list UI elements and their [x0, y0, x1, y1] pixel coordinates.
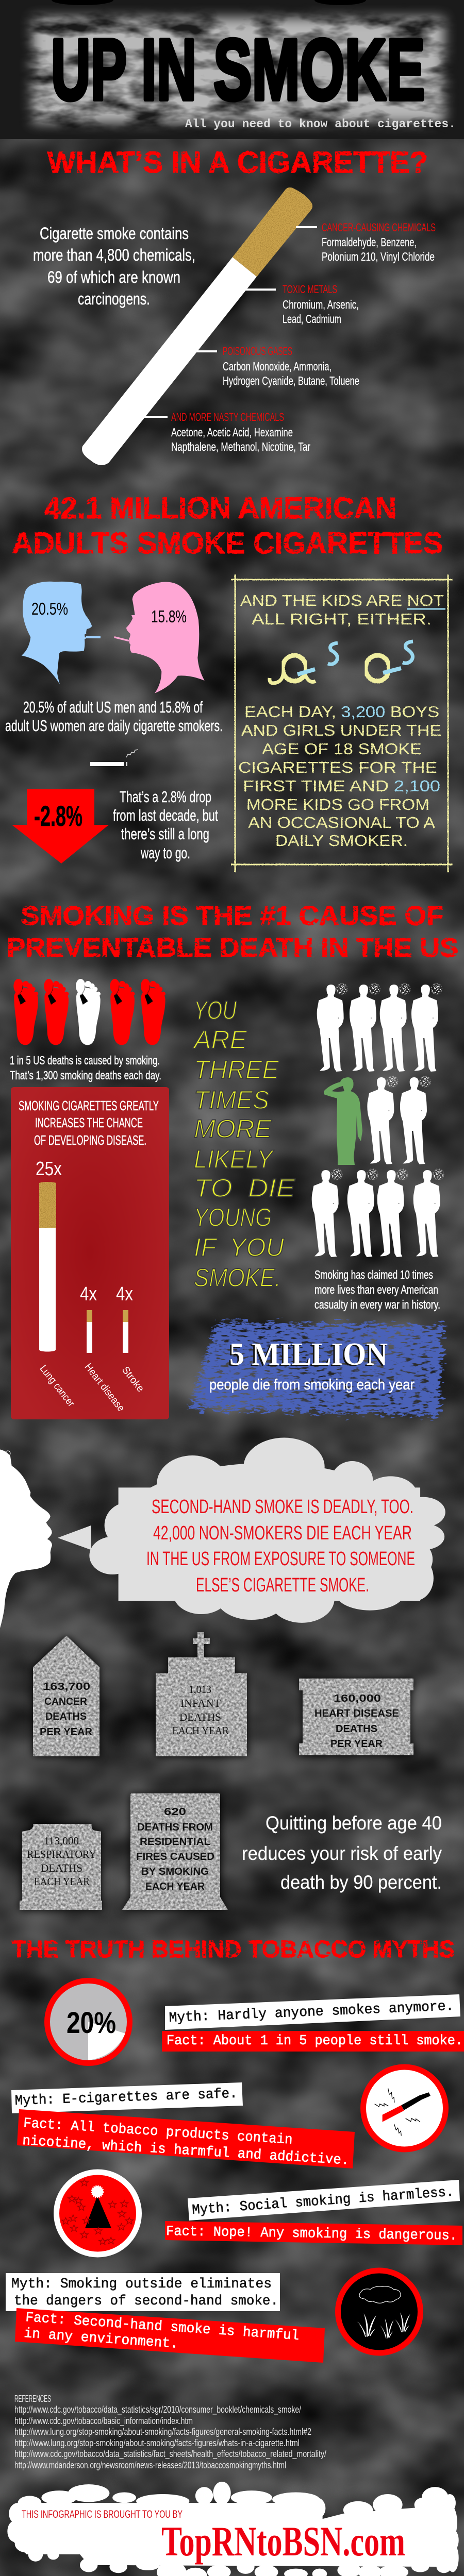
myth 4: the dangers of second-hand smoke. — [14, 2294, 278, 2309]
label: toxic metals — [245, 283, 359, 326]
heading: what's in a cigarette: WHAT’S IN A CIGARETTE? — [47, 146, 428, 179]
caption: 1 in 5 deaths: 1 in 5 US deaths is caused by smoking. — [10, 1054, 160, 1067]
label: and more nasty chemicals: Napthalene, Methanol, Nicotine, Tar — [171, 440, 310, 453]
chalk body text: FIRST TIME AND 2,100 — [243, 777, 440, 795]
intro text: Cigarette smoke contains — [40, 224, 189, 243]
myth 3: Myth: Social smoking is harmless. — [192, 2185, 454, 2218]
heading: tobacco myths: THE TRUTH BEHIND TOBACCO MYTHS — [12, 1936, 455, 1962]
chalk body text: MORE KIDS GO FROM — [246, 795, 429, 814]
tombstone: respiratory: 113,000 — [44, 1835, 79, 1847]
text: drop from last decade: there’s still a long — [121, 825, 209, 843]
panel: cigarette contents — [33, 188, 436, 465]
callout: second-hand smoke cloud — [58, 1438, 445, 1623]
heading: 42.1 million adults: 42.1 MILLION AMERICAN — [44, 492, 396, 525]
caption: daily smokers — [5, 698, 223, 735]
panel: chalkboard kids — [231, 574, 453, 872]
label: poisonous gases: POISONOUS GASES — [223, 345, 292, 358]
label: toxic metals: Chromium, Arsenic, — [283, 298, 359, 311]
title: IN — [141, 21, 196, 118]
text: three times more likely: IF YOU — [194, 1233, 285, 1262]
text: quitting before 40: reduces your risk of early — [242, 1843, 442, 1864]
footer cloud — [7, 2482, 459, 2576]
panel: disease risk chart — [11, 1087, 169, 1419]
caption: 1 in 5 deaths — [10, 1054, 161, 1082]
tombstone: cancer — [33, 1636, 100, 1756]
icon: man profile — [22, 582, 101, 684]
caption: 1 in 5 deaths: That’s 1,300 smoking deaths each day. — [10, 1069, 161, 1082]
arrow: -2.8% drop: -2.8% — [34, 800, 82, 832]
callout: 5 million: people die from smoking each year — [209, 1377, 415, 1393]
bar: stroke 4x: 4x — [116, 1283, 133, 1305]
bar: heart disease 4x: 4x — [80, 1283, 97, 1305]
callout: 5 million: 5 MILLION — [229, 1337, 388, 1372]
fact 2 — [17, 2109, 355, 2169]
chalk heading: ALL RIGHT, EITHER. — [252, 610, 432, 628]
label: poisonous gases — [195, 345, 359, 387]
intro text: more than 4,800 chemicals, — [33, 246, 195, 264]
label: cancer-causing chemicals: Formaldehyde, Benzene, — [322, 235, 417, 249]
chalk body text: CIGARETTES FOR THE — [238, 758, 437, 776]
heading: number one cause: SMOKING IS THE #1 CAUSE OF — [21, 901, 443, 931]
tombstone: cancer: CANCER — [44, 1696, 88, 1707]
bar: heart disease 4x: Heart disease — [82, 1361, 127, 1414]
tombstone: residential fires: RESIDENTIAL — [140, 1836, 210, 1848]
text: drop from last decade: way to go. — [140, 844, 190, 862]
tombstone: respiratory: RESPIRATORY — [27, 1848, 96, 1860]
tombstone: residential fires: FIRES CAUSED — [136, 1851, 214, 1862]
references — [14, 2394, 326, 2470]
label: and more nasty chemicals — [144, 411, 310, 453]
text: drop from last decade: from last decade, but — [113, 806, 218, 824]
chalk body text: AGE OF 18 SMOKE — [262, 740, 422, 758]
label: and more nasty chemicals: AND MORE NASTY CHEMICALS — [171, 411, 284, 423]
chalk body text — [238, 703, 441, 850]
tombstone: respiratory: EACH YEAR — [34, 1875, 90, 1888]
bar: stroke 4x: Stroke — [120, 1364, 146, 1394]
text: three times more likely: YOUNG — [194, 1203, 272, 1232]
label: poisonous gases: Carbon Monoxide, Ammonia, — [223, 360, 332, 373]
myth 4 — [6, 2273, 280, 2311]
label: toxic metals: TOXIC METALS — [283, 283, 337, 296]
tombstone: cancer: 163,700 — [43, 1681, 90, 1692]
text: drop from last decade: That’s a 2.8% drop — [120, 788, 211, 806]
tombstone: heart disease: DEATHS — [336, 1723, 377, 1735]
tombstone: cancer: DEATHS — [45, 1711, 87, 1722]
label: cancer-causing chemicals — [296, 221, 436, 263]
references: http://www.mdanderson.org/newsroom/news-releases/2013/tobaccosmokingmyths.html — [14, 2460, 286, 2470]
panel title: INCREASES THE CHANCE — [35, 1115, 143, 1130]
text: drop from last decade — [113, 788, 218, 862]
icon: 20 percent pie — [47, 1980, 130, 2063]
intro text: carcinogens. — [78, 290, 150, 308]
panel title: OF DEVELOPING DISEASE. — [34, 1132, 146, 1148]
heading: 42.1 million adults: ADULTS SMOKE CIGARETTES — [12, 527, 443, 560]
intro text: 69 of which are known — [47, 268, 180, 286]
callout text: ELSE’S CIGARETTE SMOKE. — [196, 1574, 369, 1596]
arrow: -2.8% drop — [12, 789, 109, 863]
cigarette illustration — [82, 188, 312, 465]
header banner — [0, 0, 464, 139]
icon: party hat — [57, 2172, 139, 2255]
callout: 5 million — [189, 1322, 442, 1416]
bar: lung cancer 25x: 25x — [36, 1158, 62, 1180]
text: three times more likely: THREE — [194, 1055, 279, 1084]
icon: head silhouette exhaling — [0, 1449, 52, 1628]
chalk body text: AND GIRLS UNDER THE — [241, 721, 441, 739]
tombstone: respiratory: DEATHS — [41, 1862, 82, 1874]
tombstone: residential fires: DEATHS FROM — [137, 1822, 213, 1833]
panel: smoking rates by sex — [5, 582, 223, 863]
bar: lung cancer 25x — [36, 1158, 77, 1409]
chalk body text: DAILY SMOKER. — [275, 832, 408, 850]
caption: daily smokers: adult US women are daily cigarette smokers. — [5, 717, 223, 735]
icon: woman profile: 15.8% — [151, 607, 187, 626]
tombstone: respiratory — [20, 1824, 102, 1910]
tombstone: cancer: PER YEAR — [40, 1726, 93, 1738]
callout text — [146, 1496, 415, 1596]
myth 4: Myth: Smoking outside eliminates — [11, 2277, 272, 2292]
intro text — [33, 224, 195, 308]
chart: men and soldier — [312, 982, 444, 1311]
bar: stroke 4x — [116, 1283, 146, 1394]
tombstone: heart disease — [299, 1679, 413, 1755]
fact 4: Fact: Second-hand smoke is harmful — [25, 2310, 300, 2344]
panel title — [19, 1098, 159, 1148]
tombstone: residential fires — [122, 1793, 228, 1910]
tombstone: heart disease: PER YEAR — [330, 1738, 383, 1750]
text: three times more likely: SMOKE. — [194, 1263, 281, 1292]
chart: feet 1 in 5 — [10, 979, 165, 1082]
heading: number one cause — [7, 901, 458, 963]
label: poisonous gases: Hydrogen Cyanide, Butane, Toluene — [223, 374, 359, 387]
bar: lung cancer 25x: Lung cancer — [38, 1363, 77, 1409]
tombstone: infant: 1,013 — [189, 1683, 211, 1696]
title: UP — [51, 21, 127, 118]
fact 4 — [15, 2308, 325, 2363]
icon: saluting soldier — [324, 1077, 362, 1165]
tombstone: infant: EACH YEAR — [172, 1724, 229, 1737]
references: http://www.cdc.gov/tobacco/data_statistics/sgr/2010/consumer_booklet/chemicals_smoke/ — [14, 2404, 301, 2415]
title — [51, 21, 425, 118]
caption: daily smokers: 20.5% of adult US men and 15.8% of — [23, 698, 203, 716]
references: http://www.lung.org/stop-smoking/about-smoking/facts-figures/whats-in-a-cigarette.html — [14, 2438, 300, 2448]
text: three times more likely: TIMES — [194, 1086, 269, 1114]
caption: war casualties — [314, 1268, 440, 1311]
tombstone: residential fires: BY SMOKING — [141, 1866, 209, 1877]
text: quitting before 40 — [242, 1812, 442, 1893]
fact 4: in any environment. — [23, 2326, 179, 2352]
references: http://www.cdc.gov/tobacco/data_statistics/fact_sheets/health_effects/tobacco_related_mortality/ — [14, 2449, 326, 2460]
tombstone: heart disease: HEART DISEASE — [314, 1708, 399, 1719]
subtitle: All you need to know about cigarettes. — [185, 117, 456, 131]
bar: heart disease 4x — [80, 1283, 127, 1414]
white men rows — [312, 982, 444, 1257]
icon: 20 percent pie: 20% — [67, 2006, 116, 2040]
chalk heading: AND THE KIDS ARE NOT — [240, 591, 444, 609]
references: http://www.lung.org/stop-smoking/about-smoking/facts-figures/general-smoking-facts.html#2 — [14, 2427, 311, 2437]
references: REFERENCES — [14, 2394, 51, 2404]
chalk body text: AN OCCASIONAL TO A — [248, 814, 435, 832]
chalk heading — [240, 591, 445, 628]
fact 2: nicotine, which is harmful and addictive. — [22, 2133, 350, 2169]
tombstone: infant: INFANT — [180, 1697, 221, 1709]
label: toxic metals: Lead, Cadmium — [283, 312, 341, 326]
heading: 42.1 million adults — [12, 492, 443, 560]
fact 2: Fact: All tobacco products contain — [23, 2116, 293, 2148]
tombstone: residential fires: 620 — [164, 1806, 186, 1818]
chalk doodle: smoke rings — [270, 641, 413, 683]
text: quitting before 40: Quitting before age 40 — [266, 1812, 442, 1834]
text: three times more likely: ARE — [192, 1025, 247, 1054]
text: three times more likely — [192, 996, 295, 1292]
references: http://www.cdc.gov/tobacco/basic_information/index.htm — [14, 2416, 193, 2427]
sponsor line: THIS INFOGRAPHIC IS BROUGHT TO YOU BY — [22, 2509, 183, 2520]
text: three times more likely: YOU — [194, 996, 237, 1025]
text: three times more likely: MORE — [194, 1114, 272, 1143]
tombstone: infant — [156, 1632, 247, 1756]
chalk frame — [231, 574, 453, 872]
text: three times more likely: LIKELY — [194, 1145, 274, 1174]
tombstone: residential fires: EACH YEAR — [145, 1881, 205, 1892]
tombstone: infant: DEATHS — [179, 1711, 221, 1723]
icon: woman profile — [114, 582, 205, 693]
panel title: SMOKING CIGARETTES GREATLY — [19, 1098, 159, 1113]
icon: man profile: 20.5% — [31, 599, 68, 618]
icon: small lit cigarette — [90, 750, 138, 766]
chalk body text: EACH DAY, 3,200 BOYS — [244, 703, 439, 721]
myth 1: Myth: Hardly anyone smokes anymore. — [169, 1999, 454, 2026]
text: three times more likely: TO DIE — [194, 1174, 295, 1202]
text: quitting before 40: death by 90 percent. — [280, 1872, 442, 1893]
icon: outdoors cloud and grass — [338, 2270, 421, 2353]
myth 2: Myth: E-cigarettes are safe. — [14, 2087, 238, 2109]
icon: e-cigarette — [363, 2067, 445, 2149]
heading: number one cause: PREVENTABLE DEATH IN THE US — [7, 933, 458, 963]
tombstone: heart disease: 160,000 — [334, 1693, 381, 1704]
label: and more nasty chemicals: Acetone, Acetic Acid, Hexamine — [171, 426, 293, 439]
